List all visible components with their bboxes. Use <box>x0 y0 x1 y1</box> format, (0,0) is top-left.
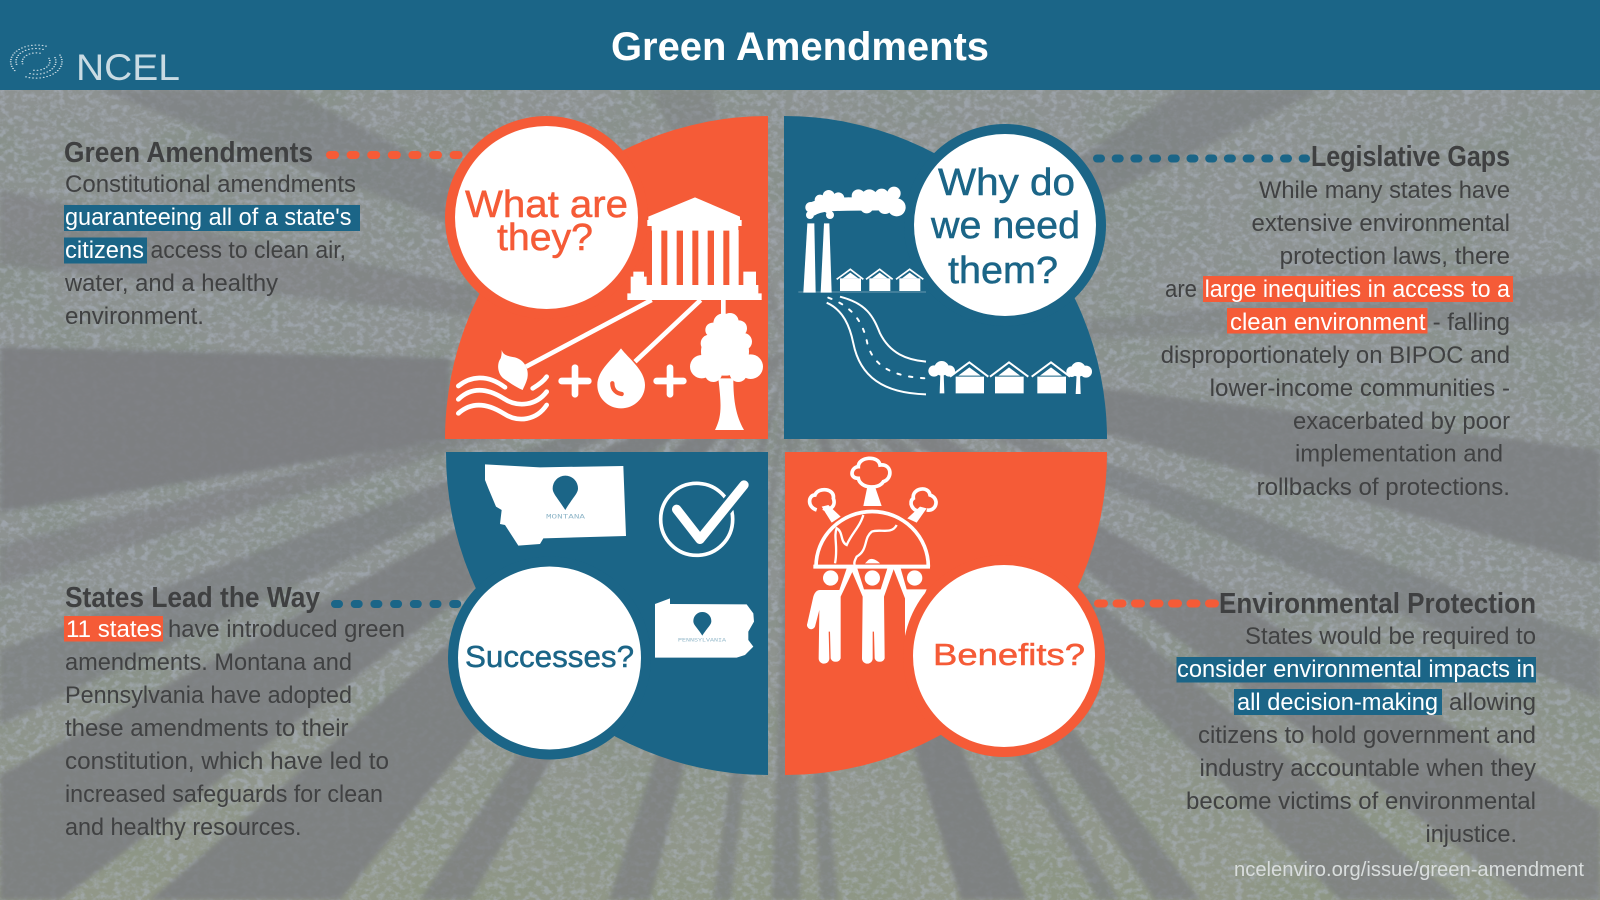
panel: why do we need them: we need <box>930 205 1080 247</box>
title: Green Amendments <box>611 25 989 69</box>
text block: environmental protection: injustice. <box>1426 821 1517 848</box>
text block: environmental protection <box>1176 588 1536 848</box>
text block: states lead the way <box>64 582 405 841</box>
text block: environmental protection: States would be required to <box>1245 623 1536 650</box>
panel: what are they: they? <box>497 217 593 259</box>
text block: green amendments: water, and a healthy <box>64 270 278 297</box>
text block: environmental protection: all decision-making <box>1237 689 1438 716</box>
text block: green amendments: citizens <box>65 237 144 264</box>
icon: factory, road and homes <box>798 187 1092 394</box>
icon: Montana map <box>485 464 626 546</box>
icon: Pennsylvania map <box>655 598 754 658</box>
text block: green amendments: access to clean air, <box>150 237 346 264</box>
logo: NCEL: NCEL <box>76 47 180 88</box>
text block: legislative gaps: While many states have <box>1259 177 1510 204</box>
text block: states lead the way: these amendments to their <box>65 715 349 742</box>
text block: legislative gaps: exacerbated by poor <box>1293 408 1510 435</box>
text block: states lead the way: increased safeguards for clean <box>65 781 383 808</box>
text block: states lead the way: States Lead the Way <box>65 582 320 614</box>
panel: successes: Successes? <box>465 639 634 674</box>
header bar <box>0 0 1600 90</box>
text block: legislative gaps: implementation and <box>1295 440 1503 468</box>
icon: check mark <box>661 483 744 555</box>
text block: green amendments: environment. <box>65 303 204 330</box>
text block: states lead the way: 11 states <box>66 616 162 643</box>
icon: Montana map: MONTANA <box>546 513 585 521</box>
text block: environmental protection: Environmental Protection <box>1219 588 1536 620</box>
logo: NCEL <box>11 45 180 88</box>
panel: why do we need them: Why do <box>938 162 1075 204</box>
text block: legislative gaps: are <box>1165 276 1197 303</box>
panel: benefits: Benefits? <box>933 637 1085 672</box>
connector: legislative gaps <box>1097 154 1306 162</box>
panel: successes <box>446 452 768 775</box>
panel: what are they: What are <box>465 184 628 226</box>
text block: green amendments <box>64 137 360 330</box>
text block: environmental protection: citizens to hold government and <box>1198 722 1536 749</box>
text block: legislative gaps: extensive environmental <box>1252 210 1510 237</box>
text block: green amendments: Green Amendments <box>64 137 313 169</box>
text block: legislative gaps: large inequities in access to a <box>1205 276 1511 303</box>
text block: environmental protection: allowing <box>1449 689 1536 716</box>
text block: legislative gaps: protection laws, there <box>1280 243 1510 270</box>
icon: Pennsylvania map: PENNSYLVANIA <box>678 638 727 644</box>
icon: people holding earth with trees <box>807 458 936 664</box>
text block: legislative gaps: - falling <box>1433 309 1510 336</box>
text block: environmental protection: become victims of environmental <box>1186 788 1536 815</box>
connector: states lead the way <box>335 600 458 608</box>
text block: green amendments: guaranteeing all of a state's <box>65 204 352 231</box>
text block: environmental protection: consider environmental impacts in <box>1177 656 1535 683</box>
text block: legislative gaps <box>1161 141 1513 501</box>
text block: legislative gaps: Legislative Gaps <box>1311 141 1510 173</box>
website url: ncelenviro.org/issue/green-amendment <box>1234 859 1584 881</box>
panel: what are they <box>445 116 768 439</box>
icon: capitol, water, air and tree <box>458 197 763 430</box>
text block: states lead the way: amendments. Montana and <box>65 649 352 676</box>
text block: legislative gaps: clean environment <box>1230 309 1426 336</box>
text block: green amendments: Constitutional amendments <box>65 171 356 198</box>
text block: states lead the way: and healthy resources. <box>65 814 302 841</box>
text block: environmental protection: industry accountable when they <box>1200 755 1536 782</box>
panel: benefits <box>785 452 1107 775</box>
text block: states lead the way: constitution, which have led to <box>65 748 389 775</box>
text block: legislative gaps: disproportionately on BIPOC and <box>1161 342 1510 369</box>
connector: environmental protection <box>1098 600 1215 608</box>
connector: green amendments <box>330 151 460 159</box>
text block: states lead the way: Pennsylvania have adopted <box>65 682 352 709</box>
panel: why do we need them <box>784 116 1107 439</box>
text block: legislative gaps: lower-income communities - <box>1210 375 1510 402</box>
panel: why do we need them: them? <box>948 250 1058 292</box>
text block: states lead the way: have introduced green <box>168 616 405 643</box>
text block: legislative gaps: rollbacks of protections. <box>1257 474 1510 501</box>
